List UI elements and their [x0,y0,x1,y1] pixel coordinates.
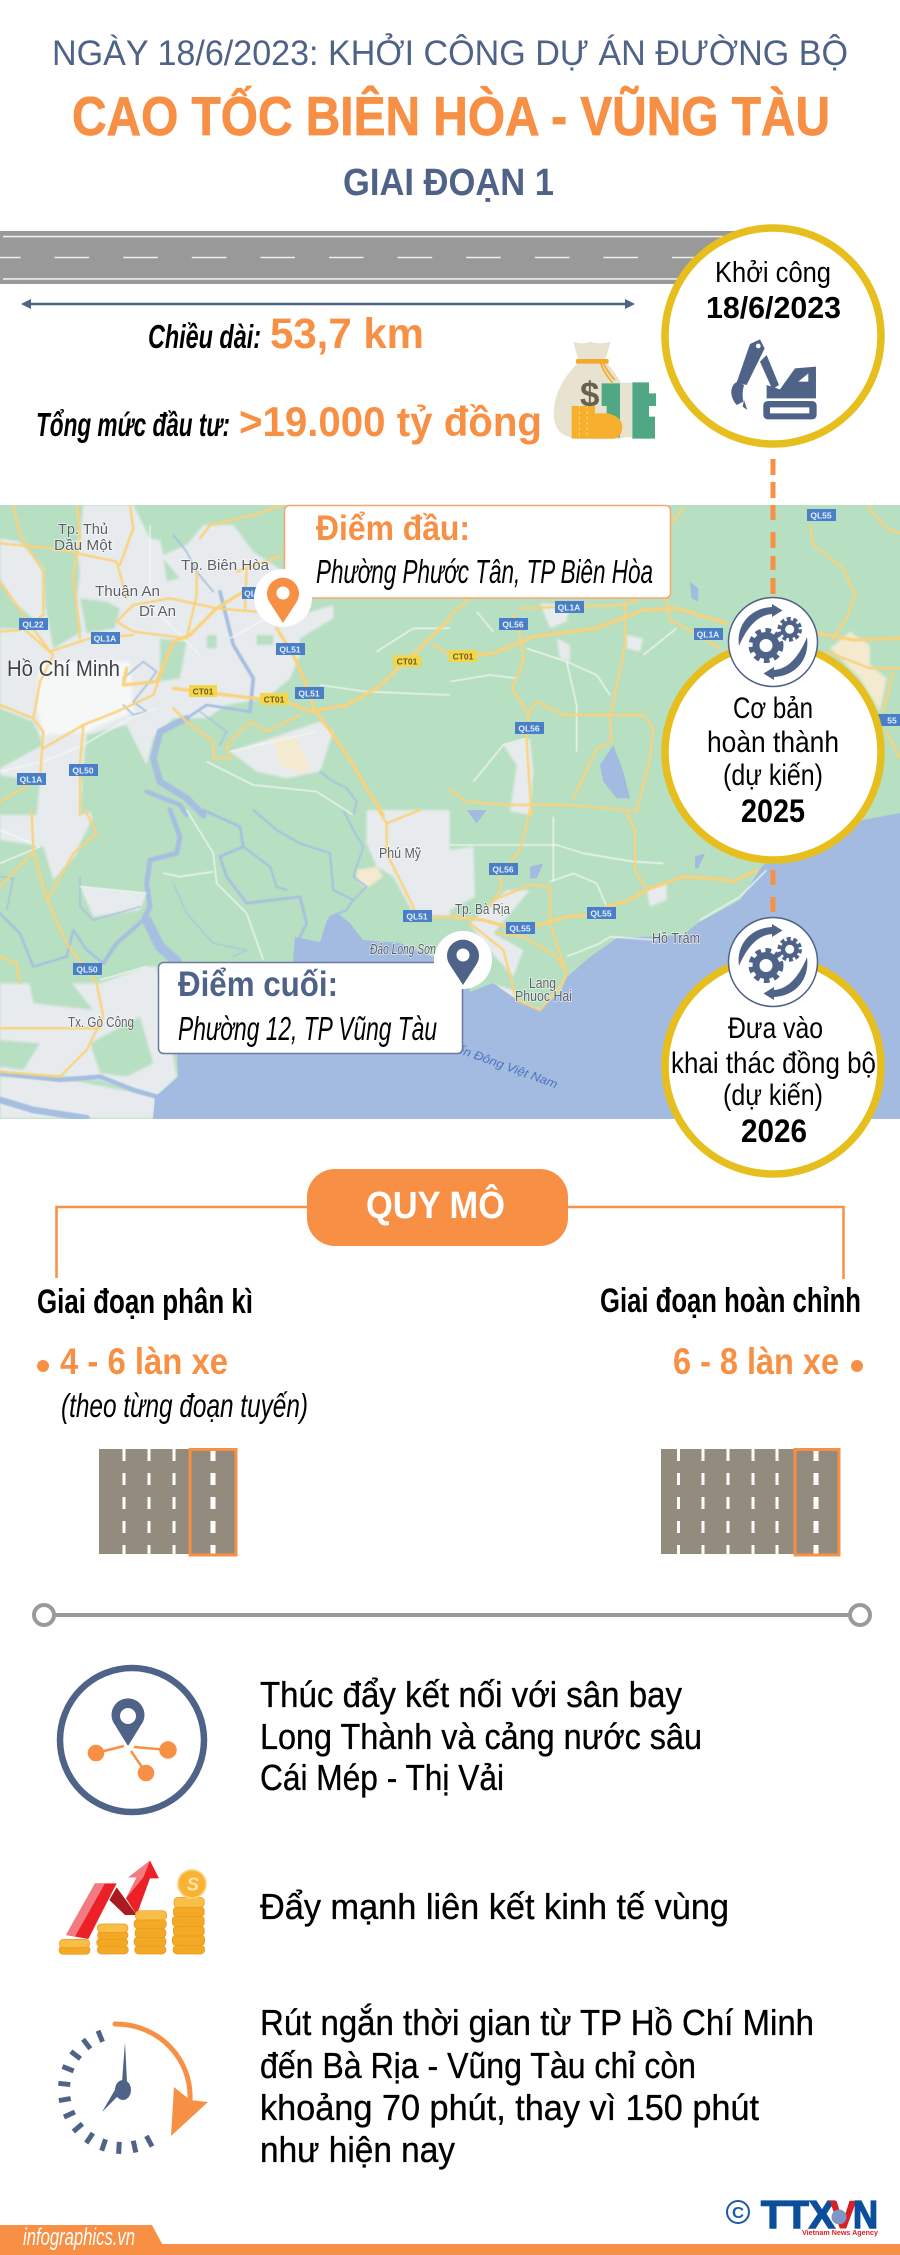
icon: clock [58,2024,208,2154]
map: place names: Dĩ An [139,603,176,620]
benefit: regional economy text: Đẩy mạnh liên kết kinh tế vùng [260,1886,729,1927]
map: route shields: QL55 [590,908,612,918]
map: place names: Thuận An [95,583,160,600]
logo: TTXVN: TTX [761,2194,835,2237]
benefit: travel time text: đến Bà Rịa - Vũng Tàu chỉ còn [260,2045,696,2086]
map: white roads [0,525,767,980]
icon: connectivity [60,1668,204,1812]
icon: start pin [254,569,312,627]
start point label: Phường Phước Tân, TP Biên Hòa [316,553,653,590]
benefit: connectivity text [260,1674,702,1798]
end point label: Điểm cuối: [178,965,338,1004]
map: route shields: QL56 [492,864,514,874]
milestone: 2026: 2026 [741,1113,807,1149]
map: place names [7,521,700,1091]
title [52,33,848,204]
footer band: infographics.vn [23,2224,135,2251]
icon: gears [728,918,818,1006]
title: GIAI ĐOẠN 1 [343,162,554,204]
timeline dashes on map [770,505,776,912]
map: route shields: QL51 [279,644,301,654]
start point label: Điểm đầu: [316,509,470,548]
panel: interim phase [37,1283,308,1555]
map: place names: Phú Mỹ [379,845,421,862]
road illustration [0,231,760,284]
map: place names: Phuoc Hai [515,988,572,1005]
end point label: Phường 12, TP Vũng Tàu [178,1010,437,1047]
logo: TTXVN: N [853,2194,878,2237]
map: route shields: QL50 [76,964,98,974]
map: route shields: QL56 [518,724,540,734]
benefit: connectivity text: Cái Mép - Thị Vải [260,1757,504,1798]
map: route shields: QL55 [810,510,832,520]
icon: money bag: $ [580,376,599,415]
map: route shields: 55 [887,716,897,726]
bracket lines [56,1207,844,1279]
map: route shields [17,509,900,975]
divider [34,1605,870,1625]
map: lakes [467,582,705,878]
milestone: 2025: 2025 [741,793,805,829]
length figure: Chiều dài: [148,318,261,355]
map: highways [0,505,900,1077]
panel: interim phase: (theo từng đoạn tuyến) [61,1387,308,1424]
icon: gears [728,598,818,686]
panel: final phase: 6 - 8 làn xe [673,1341,839,1382]
panel: interim phase: Giai đoạn phân kì [37,1283,253,1321]
benefit: travel time text: như hiện nay [260,2129,455,2170]
milestone: groundbreaking [665,228,881,444]
map: route shields: QL1A [558,602,580,612]
icon: end pin [434,931,492,989]
milestone: 2025: Cơ bản [733,692,813,725]
logo: TTXVN: Vietnam News Agency [802,2228,879,2237]
investment figure: Tổng mức đầu tư: [36,406,230,443]
icon: road 6-8 lanes [661,1449,839,1555]
panel: interim phase: 4 - 6 làn xe [60,1341,228,1382]
investment figure [36,398,542,445]
timeline dashes [770,459,776,498]
map: route shields: QL [244,588,256,598]
logo: TTXVN: C [732,2205,744,2222]
milestone: groundbreaking: 18/6/2023 [706,290,841,325]
end point label [158,962,462,1054]
map: route shields: QL50 [72,766,94,776]
start point label [284,506,670,598]
map: route shields: QL56 [502,620,524,630]
benefit: travel time text: khoảng 70 phút, thay vì 150 phút [260,2087,759,2128]
icon: road 4-6 lanes [99,1449,236,1555]
map: route shields: QL1A [20,774,42,784]
map: place names: Tp. Bà Rịa [455,901,511,918]
milestone: groundbreaking: Khởi công [715,257,831,289]
benefit: travel time text [260,2002,814,2170]
milestone: 2026: Đưa vào [728,1012,823,1045]
logo: TTXVN [727,2194,879,2237]
milestone: 2026 [665,918,881,1174]
milestone: 2025: (dự kiến) [723,759,823,792]
map: route shields: QL51 [406,912,428,922]
logo: TTXVN: V [830,2194,856,2237]
footer band [0,2224,900,2255]
icon: coins and growth arrow: S [187,1874,200,1895]
map: rivers [0,535,367,1118]
map: route shields: CT01 [397,656,418,666]
map: route shields: QL55 [509,924,531,934]
icon: coins and growth arrow [59,1861,206,1954]
panel: map [0,505,900,1119]
map: place names: Hồ Tràm [652,930,700,947]
icon: money bag [554,342,656,439]
map: route shields: QL1A [94,634,116,644]
icon: excavator [731,339,817,419]
investment figure: >19.000 tỷ đồng [239,398,542,445]
benefit: connectivity text: Thúc đẩy kết nối với sân bay [260,1674,682,1715]
map: place names: Lang [529,975,556,992]
panel: final phase [600,1282,863,1555]
heading: scale: QUY MÔ [366,1182,505,1227]
map: place names: Tx. Gò Công [68,1014,134,1031]
map: route shields: CT01 [264,694,285,704]
map: place names: Dầu Một [54,537,113,554]
length figure [148,310,424,358]
map: place names: Tp. Biên Hòa [181,557,270,574]
map: place names: Hồ Chí Minh [7,656,120,681]
milestone: 2025 [665,598,881,860]
map: route shields: CT01 [453,652,474,662]
benefit: connectivity text: Long Thành và cảng nước sâu [260,1716,702,1757]
map: place names: Đảo Long Sơn [370,941,436,958]
map: route shields: CT01 [193,686,214,696]
map: route shields: QL1A [697,630,719,640]
heading: scale [307,1169,568,1246]
map: route shields: QL51 [298,688,320,698]
map: land use [0,505,887,1118]
map: sea [153,813,900,1119]
milestone: 2026: (dự kiến) [723,1079,823,1112]
length figure: 53,7 km [270,310,424,358]
benefit: travel time text: Rút ngắn thời gian từ TP Hồ Chí Minh [260,2002,814,2043]
title: NGÀY 18/6/2023: KHỞI CÔNG DỰ ÁN ĐƯỜNG BỘ [52,33,848,73]
map: route shields: QL22 [22,620,44,630]
length arrow [21,299,635,309]
milestone: 2025: hoàn thành [707,726,839,759]
map: place names: Biển Đông Việt Nam [444,1038,560,1091]
map: place names: Tp. Thủ [58,521,108,538]
